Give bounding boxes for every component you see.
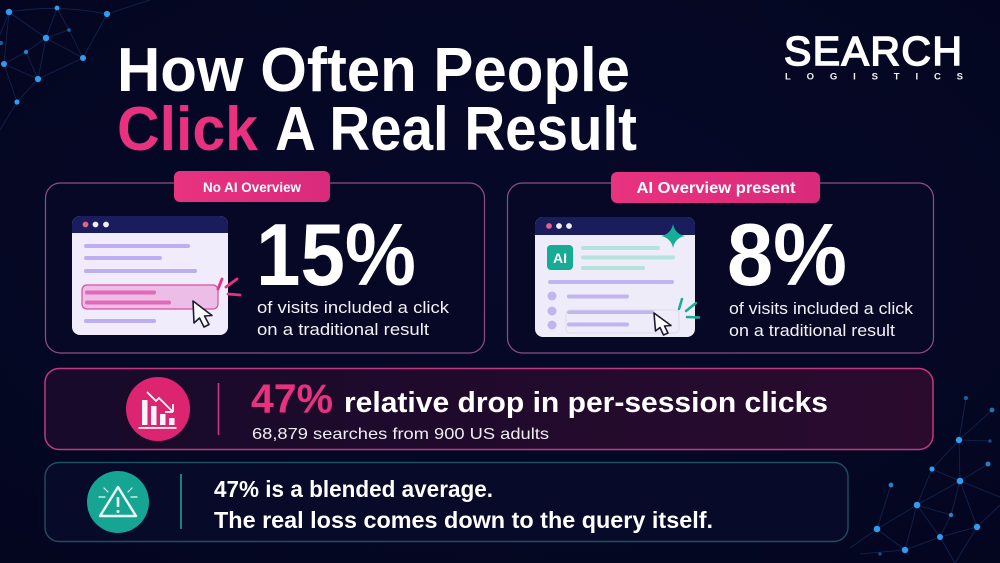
network decoration: bottom right [850, 396, 1000, 563]
tab: No AI Overview [174, 171, 330, 202]
logo: Search Logistics: SEARCH [784, 28, 962, 74]
text: sample size: 68,879 searches from 900 US adults [252, 426, 549, 443]
icon: browser with AI answer [535, 217, 699, 337]
tab: AI Overview present: AI Overview present [636, 180, 796, 197]
tab: AI Overview present [611, 172, 820, 203]
text: AI overview caption: of visits included a click [729, 299, 914, 318]
text: AI overview caption: on a traditional result [729, 321, 895, 340]
stat: 47% relative drop: 47% [251, 376, 333, 422]
title [117, 36, 637, 164]
logo: Search Logistics: LOGISTICS [785, 72, 963, 82]
stat: 15%: 15% [256, 205, 416, 304]
panel: no AI overview [46, 171, 484, 353]
tab: No AI Overview: No AI Overview [203, 179, 301, 195]
text: no AI overview caption [257, 298, 450, 339]
text: no AI overview caption: of visits included a click [257, 298, 450, 317]
panel: relative drop callout [45, 368, 933, 450]
panel: blended average note [45, 462, 848, 542]
title: A Real Result [275, 95, 637, 164]
panel: AI overview present [508, 172, 934, 353]
text: no AI overview caption: on a traditional result [257, 320, 429, 339]
text: blended average message: 47% is a blended average. [214, 476, 493, 502]
text: AI overview caption [729, 299, 914, 340]
icon: declining bar chart [126, 377, 190, 441]
icon: warning triangle [87, 471, 149, 533]
heading: relative drop: relative drop in per-session clicks [344, 387, 828, 419]
text: blended average message [214, 476, 713, 533]
title: How Often People [117, 36, 630, 105]
icon: browser with AI answer: AI [553, 250, 567, 266]
icon: browser with highlighted result [72, 216, 240, 335]
network decoration: top left [0, 0, 150, 130]
text: blended average message: The real loss comes down to the query itself. [214, 507, 713, 533]
stat: 8%: 8% [727, 205, 847, 304]
title: Click [117, 95, 258, 164]
